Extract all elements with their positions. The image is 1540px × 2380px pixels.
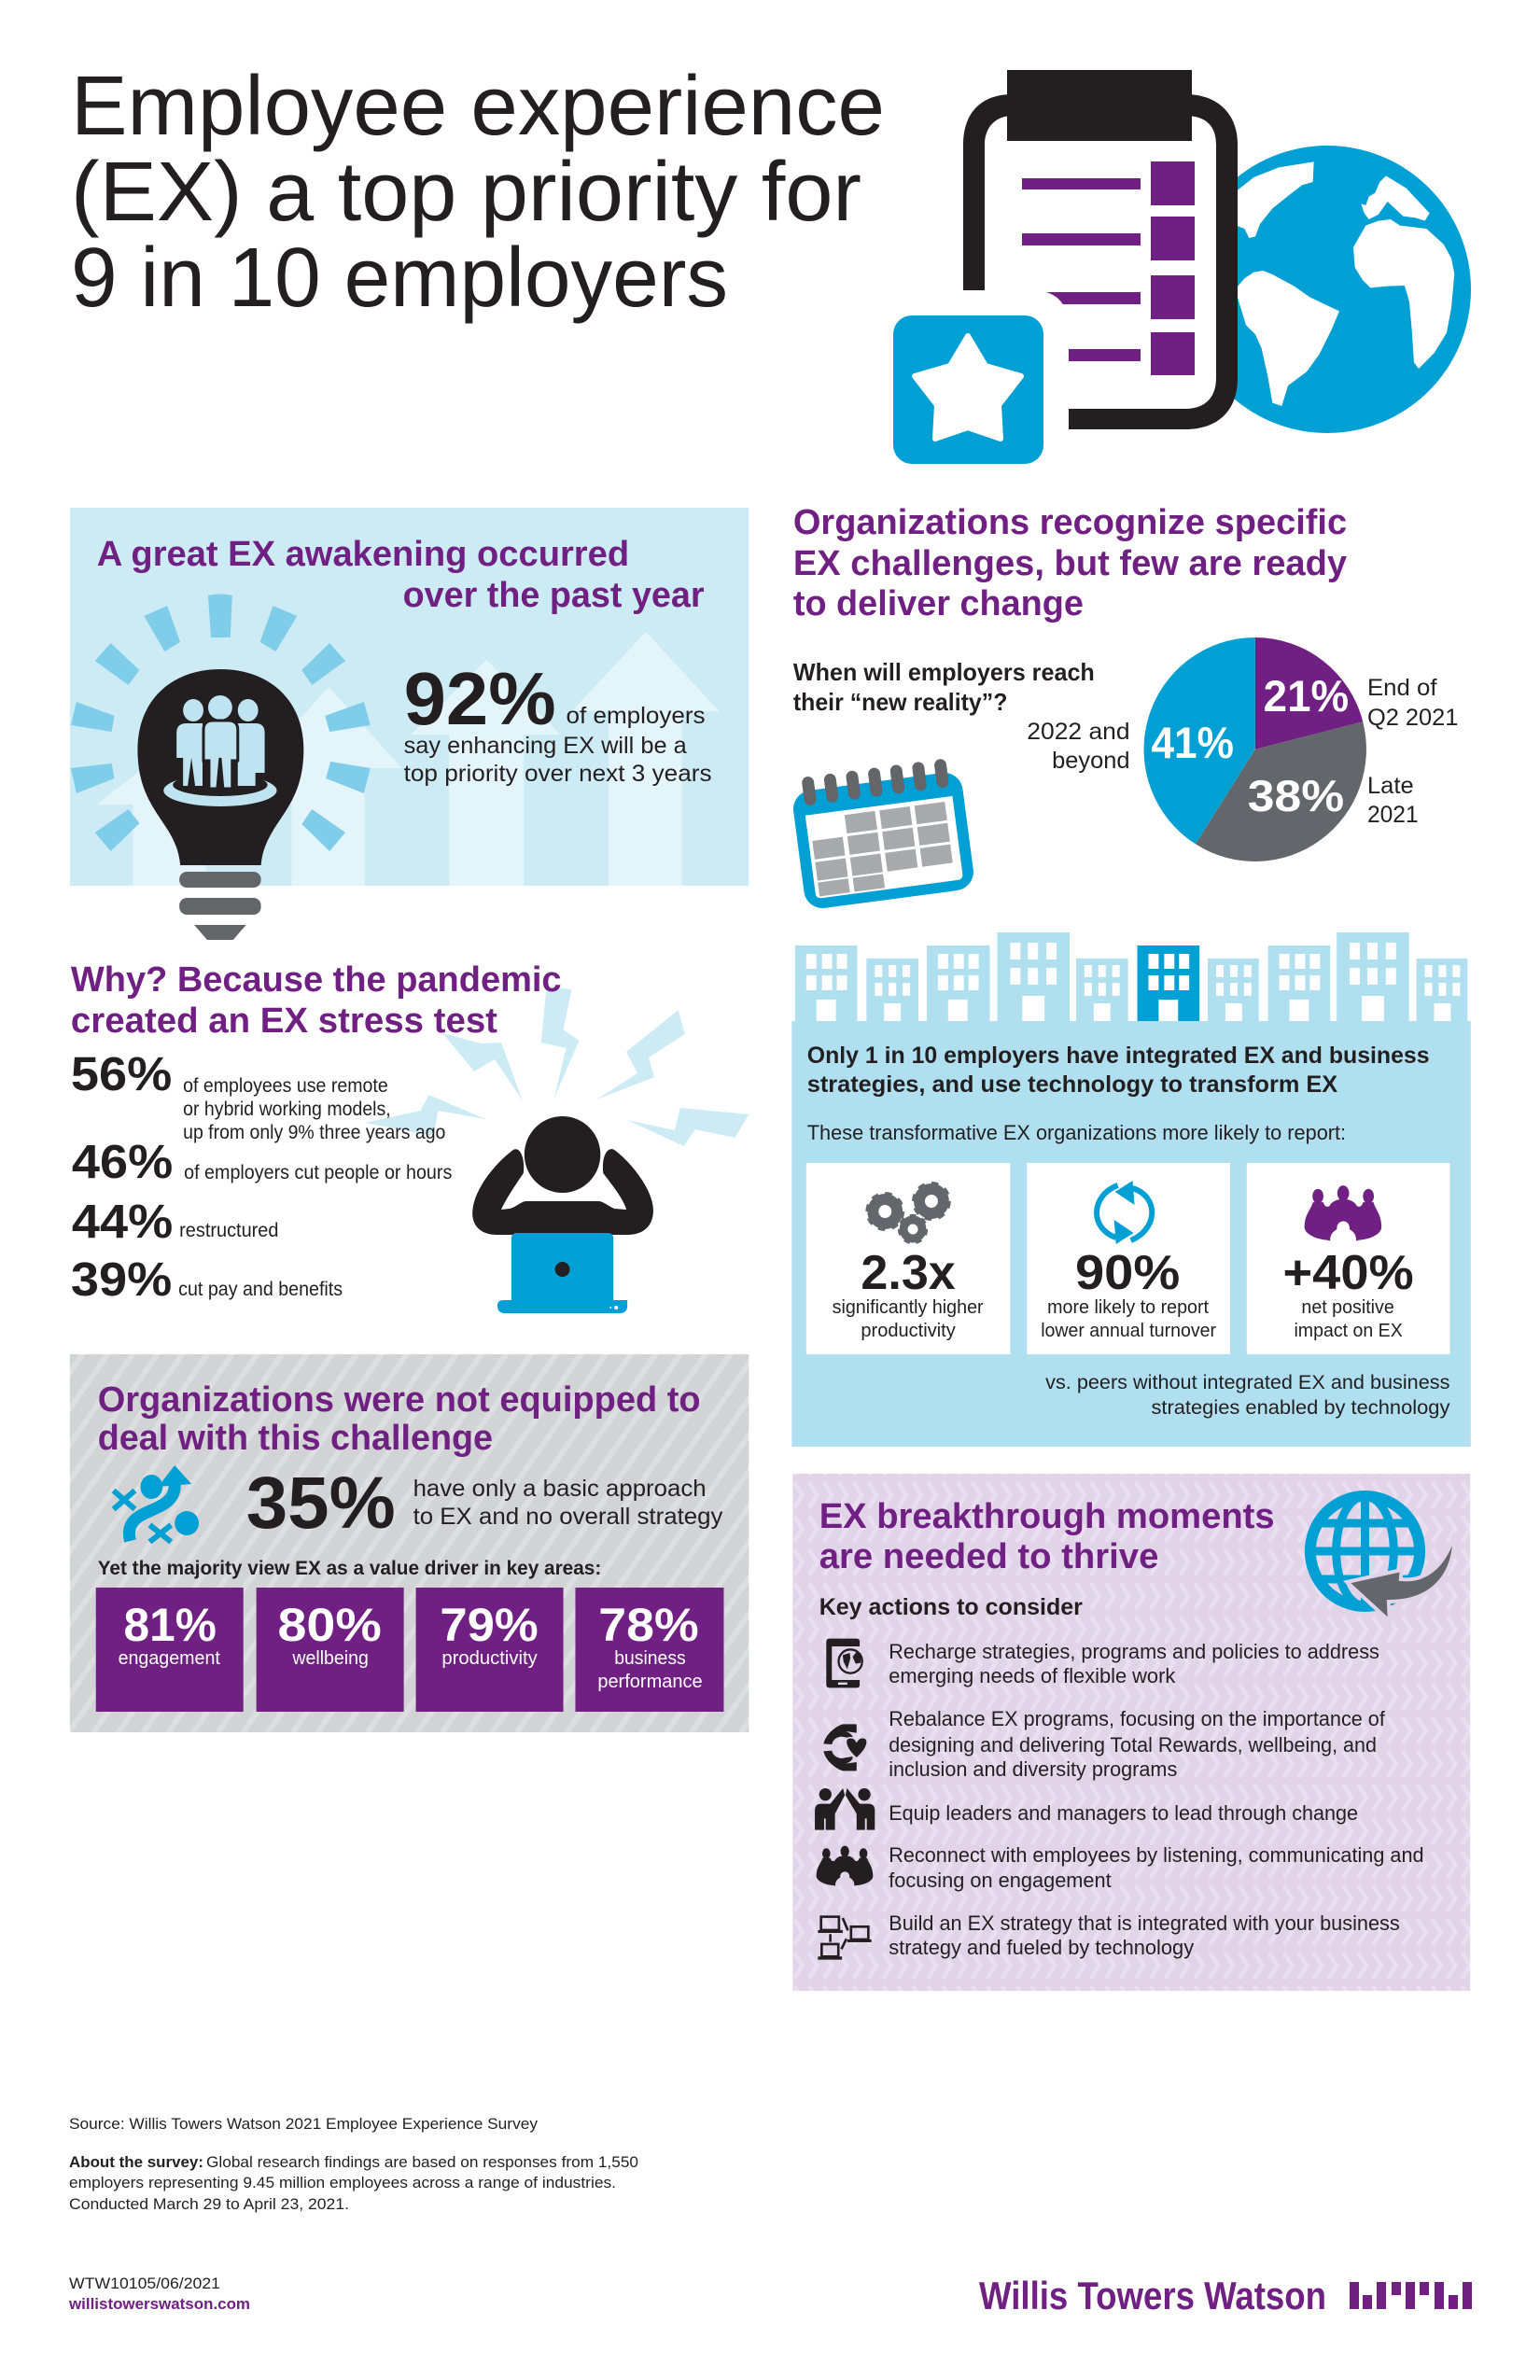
icon: lightning bolts [365, 987, 749, 1146]
subheading [793, 660, 1095, 716]
heading: created an EX stress test [71, 1001, 497, 1041]
card: net positive [1247, 1163, 1449, 1354]
stat: 46%: 46% [72, 1135, 173, 1188]
card: productivity [416, 1588, 564, 1712]
stat: 35%: to EX and no overall strategy [413, 1504, 723, 1530]
legend: 2022 and beyond: 2022 and [1027, 719, 1130, 745]
icon: clipboard [963, 70, 1238, 429]
heading: Organizations were not equipped to [98, 1380, 701, 1420]
heading: to deliver change [793, 584, 1084, 623]
stat: 46%: of employers cut people or hours [184, 1162, 452, 1183]
card: productivity [806, 1163, 1010, 1354]
logo: Willis Towers Watson: Willis Towers Watson [979, 2274, 1326, 2317]
stat: 44%: 44% [72, 1195, 173, 1248]
card: engagement: 81% [124, 1599, 217, 1651]
card: net positive: +40% [1283, 1245, 1414, 1299]
icon: globe [1183, 146, 1471, 433]
heading: EX challenges, but few are ready [793, 544, 1347, 583]
action: rebalance: Rebalance EX programs, focusing on the importance of [889, 1707, 1386, 1730]
heading: over the past year [403, 576, 705, 615]
stat: 35%: have only a basic approach [413, 1476, 707, 1502]
card: business performance [575, 1588, 723, 1712]
heading: EX breakthrough moments [819, 1497, 1275, 1536]
source note: Source: Willis Towers Watson 2021 Employee Experience Survey [69, 2115, 539, 2133]
action: recharge: emerging needs of flexible work [889, 1664, 1175, 1687]
panel: new reality pie [790, 503, 1458, 910]
subheading: their “new reality”? [793, 690, 1007, 716]
heading [807, 1043, 1430, 1098]
stat: 35% [246, 1462, 723, 1544]
pie chart: 21% [1264, 672, 1349, 721]
right column [790, 503, 1471, 1991]
panel: integrated EX [791, 932, 1471, 1447]
icon: globe with arrow [1310, 1496, 1454, 1621]
pie chart: 38% [1248, 772, 1344, 820]
subheading: Key actions to consider [819, 1594, 1083, 1620]
icon: checklist, star and globe [873, 70, 1471, 471]
card: lower turnover: more likely to report [1047, 1297, 1210, 1318]
action: equip [815, 1788, 1358, 1830]
stat: 92%: top priority over next 3 years [404, 761, 712, 787]
icon: light rays [71, 594, 371, 851]
card: productivity: productivity [441, 1648, 538, 1669]
about the survey: Global research findings are based on responses from 1,550 [206, 2153, 638, 2171]
legend: late 2021: Late [1367, 773, 1414, 799]
legend: end of Q2 2021: Q2 2021 [1367, 705, 1458, 731]
icon: light bulb with people [137, 669, 303, 940]
about the survey: employers representing 9.45 million employees across a range of industries. [69, 2174, 616, 2191]
action: build [818, 1911, 1400, 1960]
heading [98, 1380, 701, 1458]
panel: pandemic stress test [71, 960, 749, 1313]
action: recharge [826, 1639, 1379, 1687]
heading: Organizations recognize specific [793, 503, 1347, 542]
card: business performance: performance [597, 1672, 703, 1692]
heading: A great EX awakening occurred [97, 535, 629, 574]
legend: 2022 and beyond [1027, 719, 1130, 774]
icon: calendar [790, 757, 975, 910]
about the survey [69, 2153, 638, 2213]
panel: great EX awakening [70, 508, 749, 940]
title: Employee experience [71, 60, 885, 153]
stat: 56%: up from only 9% three years ago [183, 1122, 445, 1143]
document reference and website: willistowerswatson.com [68, 2295, 250, 2313]
about the survey: Conducted March 29 to April 23, 2021. [69, 2195, 349, 2213]
card: lower turnover [1027, 1163, 1230, 1354]
action: build: Build an EX strategy that is integrated with your business [889, 1911, 1400, 1935]
left column [70, 508, 749, 1732]
subheading: When will employers reach [793, 660, 1095, 686]
action: rebalance: inclusion and diversity programs [889, 1757, 1177, 1781]
action: rebalance [823, 1707, 1386, 1781]
card: wellbeing: 80% [277, 1599, 382, 1651]
icon: hands and heart [823, 1724, 867, 1771]
heading: strategies, and use technology to transform EX [807, 1071, 1338, 1098]
icon: sync arrows [1097, 1181, 1152, 1244]
title: 9 in 10 employers [71, 231, 728, 325]
icon: group of people [1305, 1185, 1381, 1241]
heading: deal with this challenge [98, 1419, 493, 1458]
action: reconnect: Reconnect with employees by listening, communicating and [889, 1843, 1424, 1867]
card: business performance: business [614, 1648, 686, 1669]
stat: 46% [72, 1135, 452, 1188]
heading [819, 1497, 1275, 1576]
title [71, 60, 885, 325]
card: wellbeing [257, 1588, 404, 1712]
pie chart [1144, 637, 1366, 861]
stat: 39%: cut pay and benefits [178, 1279, 343, 1300]
icon: stressed person at laptop [472, 1116, 653, 1313]
card: lower turnover: lower annual turnover [1041, 1321, 1216, 1341]
action: reconnect: focusing on engagement [889, 1869, 1112, 1892]
action: rebalance: designing and delivering Total Rewards, wellbeing, and [889, 1733, 1377, 1757]
card: business performance: 78% [598, 1599, 699, 1651]
rising arrows background [97, 632, 719, 886]
text: comparison note [1045, 1372, 1450, 1419]
stat: 39% [71, 1253, 343, 1306]
subheading: Yet the majority view EX as a value driver in key areas: [98, 1558, 601, 1579]
stat: 92%: say enhancing EX will be a [404, 733, 687, 759]
text: comparison note: vs. peers without integrated EX and business [1045, 1372, 1449, 1393]
stat: 92%: 92% [404, 657, 556, 740]
text: intro: These transformative EX organizations more likely to report: [807, 1121, 1346, 1144]
card: productivity: 79% [440, 1599, 539, 1651]
action: equip: Equip leaders and managers to lead through change [889, 1801, 1358, 1825]
icon: city buildings [795, 932, 1467, 1021]
heading [71, 960, 562, 1041]
document reference and website [68, 2275, 250, 2313]
legend: late 2021: 2021 [1367, 802, 1419, 828]
heading: Only 1 in 10 employers have integrated EX and business [807, 1043, 1430, 1069]
stat: 92%: of employers [567, 703, 706, 729]
heading [793, 503, 1347, 623]
card: lower turnover: 90% [1075, 1245, 1180, 1299]
panel: breakthrough moments [792, 1474, 1470, 1991]
stat: 92% [404, 657, 712, 787]
card: net positive: net positive [1301, 1297, 1394, 1318]
legend: 2022 and beyond: beyond [1052, 748, 1130, 774]
card: productivity: productivity [861, 1321, 956, 1341]
text: comparison note: strategies enabled by technology [1151, 1397, 1450, 1419]
stat: 56%: 56% [71, 1047, 172, 1100]
card: engagement: engagement [119, 1648, 220, 1669]
document reference and website: WTW10105/06/2021 [69, 2275, 220, 2292]
action: recharge: Recharge strategies, programs and policies to address [889, 1640, 1379, 1663]
title: (EX) a top priority for [71, 146, 861, 239]
icon: group of people [817, 1846, 873, 1886]
icon: high five [815, 1788, 875, 1830]
about the survey: About the survey: [69, 2153, 203, 2171]
panel: not equipped [70, 1354, 749, 1732]
action: build: strategy and fueled by technology [889, 1936, 1194, 1959]
card: productivity: significantly higher [833, 1297, 984, 1318]
stat: 35%: 35% [246, 1462, 396, 1544]
legend: late 2021 [1367, 773, 1419, 828]
legend: end of Q2 2021: End of [1367, 675, 1437, 701]
icon: networked laptops [818, 1917, 872, 1960]
stat: 56%: or hybrid working models, [183, 1099, 391, 1120]
icon: phone with globe [826, 1639, 862, 1687]
icon: gears [867, 1183, 949, 1243]
card: engagement [96, 1588, 244, 1712]
stat: 56% [71, 1047, 445, 1143]
action: reconnect [817, 1843, 1424, 1892]
stat: 44%: restructured [179, 1220, 278, 1241]
legend: end of Q2 2021 [1367, 675, 1458, 731]
heading [97, 535, 705, 615]
pie chart: 41% [1151, 719, 1234, 767]
icon: star tile [873, 290, 1069, 471]
card: net positive: impact on EX [1294, 1321, 1403, 1341]
card: productivity: 2.3x [861, 1245, 956, 1299]
heading: are needed to thrive [819, 1537, 1158, 1576]
stat: 44% [72, 1195, 278, 1248]
card: wellbeing: wellbeing [291, 1648, 369, 1669]
heading: Why? Because the pandemic [71, 960, 562, 1000]
icon: strategy play [114, 1465, 199, 1542]
stat: 39%: 39% [71, 1253, 172, 1306]
stat: 56%: of employees use remote [183, 1075, 388, 1097]
